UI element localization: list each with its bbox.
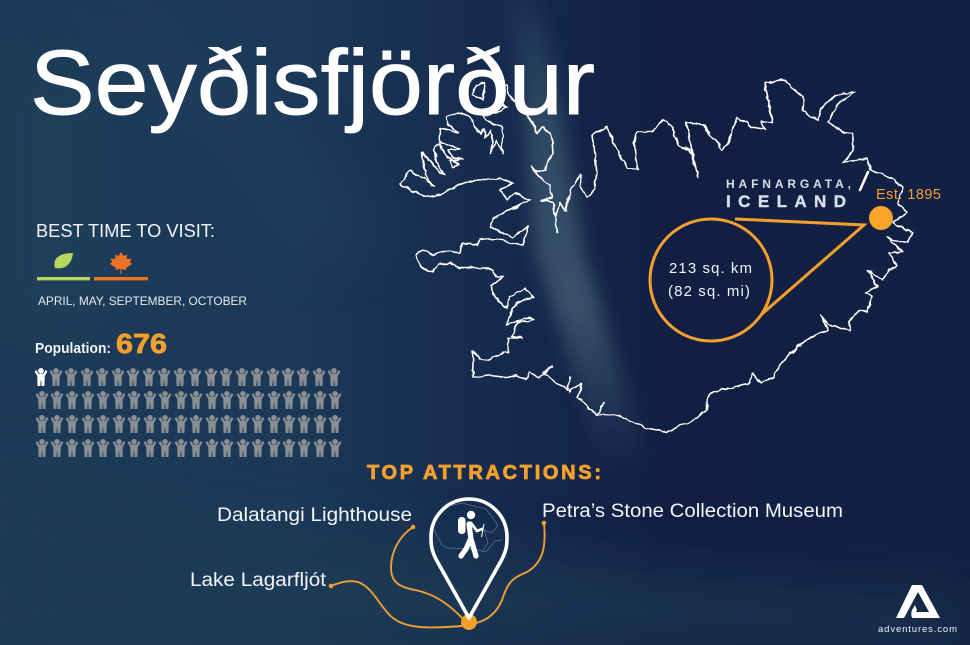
connector end dots	[329, 521, 546, 630]
population: 676	[116, 328, 167, 359]
location label: ICELAND	[726, 192, 846, 211]
labels: attractions: Dalatangi Lighthouse	[217, 505, 412, 526]
area callout: 213 sq. km	[669, 260, 752, 277]
population: Population:	[35, 341, 111, 357]
icon: green leaf	[37, 253, 90, 280]
heading: best time to visit: BEST TIME TO VISIT:	[36, 221, 215, 241]
location label	[726, 177, 851, 211]
logo: adventures.com	[878, 585, 957, 635]
title: Seyðisfjörður	[30, 32, 595, 134]
logo: adventures.com: adventures.com	[878, 624, 957, 635]
months: APRIL, MAY, SEPTEMBER, OCTOBER	[38, 296, 247, 308]
labels: attractions	[190, 501, 843, 591]
area callout: (82 sq. mi)	[668, 283, 750, 300]
map: Iceland outline	[400, 80, 912, 432]
icon: autumn leaf	[94, 252, 148, 280]
population	[35, 328, 167, 359]
spit near the location label	[860, 172, 868, 190]
heading: top attractions: TOP ATTRACTIONS:	[367, 462, 601, 484]
labels: attractions: Petra’s Stone Collection Museum	[542, 501, 843, 522]
people pictogram	[35, 368, 341, 457]
attraction connectors	[331, 523, 545, 628]
labels: attractions: Lake Lagarfljót	[190, 570, 327, 591]
icon: map pin with hiker	[431, 499, 507, 618]
established year: Est. 1895	[876, 187, 941, 203]
location label: HAFNARGATA,	[726, 177, 851, 191]
area callout	[650, 206, 893, 341]
